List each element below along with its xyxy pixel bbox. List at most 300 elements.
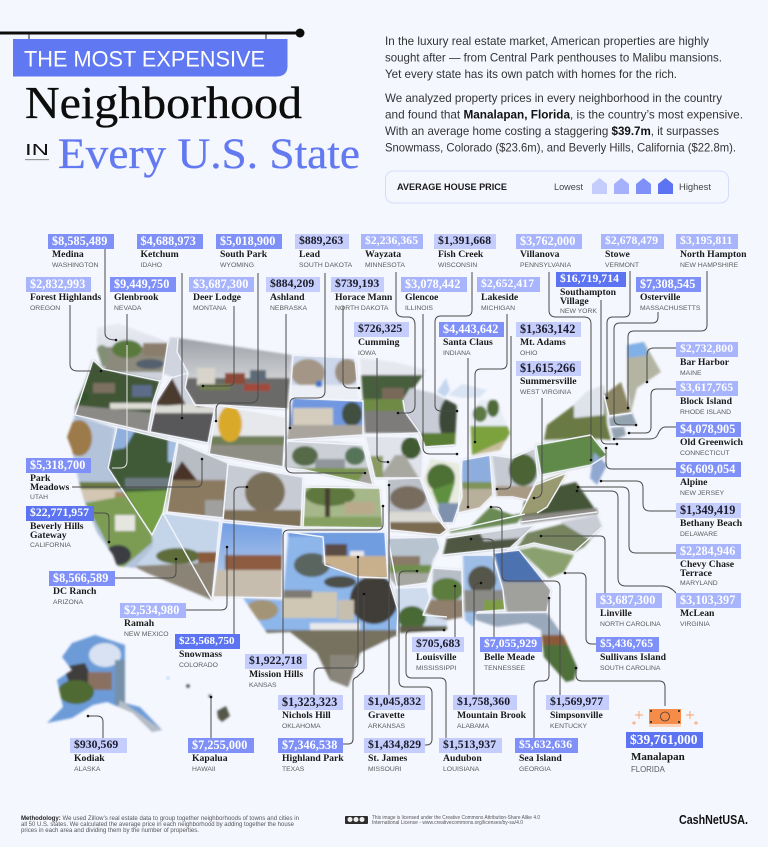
- label: Ramah: NEW MEXICO: [124, 631, 169, 638]
- label: Cumming: Cumming: [358, 337, 399, 348]
- methodology note: all 50 U.S. states. We calculated the average price in each neighborhood by adding together the house: [21, 822, 295, 828]
- state: Washington: [96, 324, 169, 382]
- label: Osterville: MASSACHUSETTS: [640, 305, 700, 312]
- label: Mountain Brook: ALABAMA: [457, 723, 489, 730]
- state: Virginia: [521, 482, 597, 522]
- label: Fish Creek: Fish Creek: [438, 249, 483, 260]
- label: DC Ranch: [49, 571, 115, 607]
- label: St. James: $1,434,829: [368, 738, 421, 751]
- label: DC Ranch: DC Ranch: [53, 586, 96, 597]
- label: Block Island: RHODE ISLAND: [680, 409, 731, 416]
- leader line: Audubon: [406, 630, 446, 738]
- state: Illinois: [423, 459, 462, 524]
- label: Belle Meade: Belle Meade: [484, 652, 535, 663]
- label: Louisville: Louisville: [416, 652, 456, 663]
- label: Gravette: Gravette: [368, 710, 405, 721]
- label: Belle Meade: $7,055,929: [484, 637, 537, 650]
- label: Beverly Hills Gateway: $22,771,957: [30, 506, 89, 519]
- label: Beverly Hills Gateway: Gateway: [30, 530, 67, 541]
- label: North Hampton: [676, 234, 746, 269]
- state: Texas: [240, 535, 400, 690]
- state: Wisconsin: [400, 385, 460, 450]
- state: Indiana: [458, 454, 494, 514]
- label: Alpine: Alpine: [680, 477, 707, 488]
- label: Ashland: [266, 277, 320, 312]
- state: Michigan: [469, 398, 510, 456]
- state: Missouri: [386, 479, 448, 536]
- label: Manalapan: Manalapan: [631, 751, 685, 763]
- leader line: Sea Island: [534, 598, 549, 738]
- label: Linville: NORTH CAROLINA: [600, 621, 661, 628]
- label: Mt. Adams: Mt. Adams: [520, 337, 566, 348]
- label: Simpsonville: [546, 695, 609, 730]
- label: Forest Highlands: Forest Highlands: [30, 292, 101, 303]
- state: New York sky: [574, 385, 604, 418]
- label: Mountain Brook: [453, 695, 526, 730]
- label: Chevy Chase Terrace: Chevy Chase: [680, 559, 734, 570]
- label: Audubon: LOUISIANA: [443, 766, 479, 773]
- label: Fish Creek: $1,391,668: [438, 234, 491, 247]
- label: Block Island: [676, 381, 738, 416]
- label: Cumming: $726,325: [358, 322, 402, 335]
- label: Ketchum: IDAHO: [140, 262, 162, 269]
- state: Tennessee: [443, 525, 535, 555]
- label: Horace Mann: [331, 277, 392, 312]
- label: Snowmass: [175, 634, 240, 670]
- label: Forest Highlands: [26, 277, 101, 312]
- leader line: Chevy Chase Terrace: [578, 487, 676, 553]
- label: Ramah: [120, 603, 186, 639]
- label: Louisville: MISSISSIPPI: [416, 665, 456, 672]
- label: Mountain Brook: $1,758,360: [457, 695, 510, 708]
- heading: in: IN: [25, 142, 49, 159]
- icon: money bill: [632, 709, 698, 727]
- label: Park Meadows: UTAH: [30, 494, 48, 501]
- label: Mountain Brook: Mountain Brook: [457, 710, 526, 721]
- leader line: Belle Meade: [471, 539, 494, 637]
- label: Stowe: [601, 234, 664, 269]
- label: Highland Park: [278, 738, 344, 774]
- label: Linville: $3,687,300: [600, 593, 655, 607]
- leader line: Deer Lodge: [203, 306, 234, 386]
- label: Sea Island: Sea Island: [519, 753, 562, 764]
- leader line: Mt. Adams: [497, 336, 511, 489]
- leader line: Mission Hills: [283, 506, 383, 654]
- label: Ramah: Ramah: [124, 618, 154, 629]
- state: Utah: [165, 440, 230, 520]
- label: Medina: WASHINGTON: [52, 262, 98, 269]
- label: Southampton Village: NEW YORK: [560, 308, 597, 315]
- state: Michigan upper peninsula: [437, 378, 487, 398]
- state: North Carolina: [517, 515, 602, 552]
- state: Kentucky: [450, 507, 525, 533]
- label: Highland Park: TEXAS: [282, 766, 304, 773]
- state: New York: [544, 385, 611, 440]
- label: Bar Harbor: Bar Harbor: [680, 357, 729, 368]
- label: Horace Mann: NORTH DAKOTA: [335, 305, 388, 312]
- label: Glencoe: [401, 277, 467, 312]
- label: Park Meadows: Meadows: [30, 482, 69, 493]
- state: Kansas: [300, 484, 385, 530]
- state: North Dakota: [290, 356, 358, 399]
- state: Montana: [175, 335, 295, 413]
- leader line: Lead: [290, 273, 325, 428]
- legend: average house price: Lowest: [554, 182, 583, 192]
- label: Santa Claus: [439, 322, 504, 357]
- label: Nichols Hill: [278, 695, 343, 730]
- leader line: Lakeside: [475, 314, 507, 442]
- leader line: Block Island: [629, 389, 676, 433]
- intro text: We analyzed property prices in every neighborhood in the country: [385, 91, 722, 105]
- label: Snowmass: $23,568,750: [179, 635, 235, 647]
- label: Belle Meade: TENNESSEE: [484, 665, 525, 672]
- legend: average house price: [386, 171, 728, 203]
- label: North Hampton: $3,195,811: [680, 234, 732, 247]
- leader line: South Park: [216, 273, 258, 421]
- label: Villanova: $3,762,000: [520, 234, 575, 248]
- intro text: [385, 34, 743, 154]
- label: Bar Harbor: [676, 342, 738, 377]
- label: Southampton Village: [556, 272, 626, 315]
- label: Mission Hills: KANSAS: [249, 682, 277, 689]
- label: Lakeside: Lakeside: [481, 292, 518, 303]
- label: Park Meadows: Park: [30, 473, 50, 484]
- leader line: Fish Creek: [435, 272, 472, 411]
- label: McLean: [676, 593, 741, 628]
- leader line: Kapalua: [210, 697, 212, 738]
- label: Wayzata: $2,236,365: [365, 234, 418, 247]
- leader line: Louisville: [454, 586, 456, 637]
- label: Sea Island: GEORGIA: [519, 766, 551, 773]
- state: Hawaii islands: [167, 677, 230, 722]
- label: Southampton Village: $16,719,714: [560, 272, 619, 285]
- state: Virginia road: [521, 508, 598, 524]
- label: Wayzata: MINNESOTA: [365, 262, 405, 269]
- label: Wayzata: [361, 234, 423, 269]
- label: Lakeside: [477, 277, 540, 312]
- leader line: Kodiak: [88, 716, 103, 738]
- label: Stowe: Stowe: [605, 249, 630, 260]
- intro text: With an average home costing a staggering $39.7m, it surpasses: [385, 124, 719, 138]
- label: Park Meadows: [26, 458, 91, 502]
- label: Glenbrook: [110, 277, 176, 312]
- label: South Park: WYOMING: [220, 262, 254, 269]
- label: Villanova: Villanova: [520, 249, 559, 260]
- hanging banner: [0, 28, 304, 76]
- label: Southampton Village: Village: [560, 296, 589, 307]
- leader line: Cumming: [377, 358, 388, 462]
- leader line: Linville: [541, 536, 605, 593]
- leader line: Glencoe: [423, 314, 457, 454]
- license text: International License - www.creativecommons.org/licenses/by-sa/4.0: [372, 820, 523, 826]
- label: Chevy Chase Terrace: [676, 544, 741, 587]
- label: Forest Highlands: OREGON: [30, 305, 60, 312]
- label: Audubon: $1,513,937: [443, 738, 496, 751]
- label: Ashland: Ashland: [270, 292, 304, 303]
- label: Ashland: NEBRASKA: [270, 305, 307, 312]
- state: Connecticut: [611, 427, 626, 440]
- label: Forest Highlands: $2,832,993: [30, 277, 85, 291]
- label: Manalapan: FLORIDA: [631, 765, 665, 774]
- label: Alpine: $6,609,054: [680, 462, 735, 476]
- label: Kodiak: [70, 738, 127, 774]
- label: Kapalua: [188, 738, 254, 774]
- label: Snowmass: Snowmass: [179, 649, 222, 660]
- state: West Virginia: [520, 473, 567, 515]
- label: Summersville: WEST VIRGINIA: [520, 389, 571, 396]
- leader line: Horace Mann: [343, 306, 359, 388]
- label: Bar Harbor: MAINE: [680, 370, 702, 377]
- state: Mississippi: [425, 566, 465, 622]
- label: North Hampton: NEW HAMPSHIRE: [680, 262, 738, 269]
- label: McLean: $3,103,397: [680, 593, 735, 607]
- legend icon: low house: [614, 178, 629, 194]
- leader line: Old Greenwich: [614, 427, 676, 439]
- label: Old Greenwich: CONNECTICUT: [680, 450, 729, 457]
- label: Glenbrook: $9,449,750: [114, 277, 169, 291]
- creative commons badge: [345, 816, 368, 824]
- state: Maine sky: [627, 342, 648, 358]
- label: Simpsonville: KENTUCKY: [550, 723, 587, 730]
- label: Fish Creek: [434, 234, 496, 269]
- label: Deer Lodge: [189, 277, 254, 312]
- label: McLean: VIRGINIA: [680, 621, 710, 628]
- label: Manalapan: [626, 732, 703, 774]
- label: Block Island: $3,617,765: [680, 381, 733, 394]
- label: Osterville: $7,308,545: [640, 277, 695, 291]
- label: Sullivans Island: Sullivans Island: [600, 652, 666, 663]
- label: Glenbrook: Glenbrook: [114, 292, 159, 303]
- label: Ketchum: Ketchum: [140, 249, 179, 260]
- leader line: Stowe: [607, 271, 630, 398]
- leader line: McLean: [577, 491, 676, 593]
- state: Alabama: [460, 553, 508, 629]
- label: Medina: Medina: [52, 249, 84, 260]
- label: Sullivans Island: $5,436,765: [600, 637, 653, 650]
- label: Horace Mann: Horace Mann: [335, 292, 392, 303]
- label: Beverly Hills Gateway: Beverly Hills: [30, 521, 84, 532]
- state: California: [66, 416, 154, 569]
- label: Ketchum: [137, 234, 203, 269]
- label: Cumming: [354, 322, 409, 357]
- leader line: Forest Highlands: [70, 305, 101, 371]
- label: Bethany Beach: DELAWARE: [680, 531, 718, 538]
- state: Louisiana: [394, 588, 449, 634]
- state: Iowa: [366, 436, 422, 480]
- label: Linville: Linville: [600, 608, 632, 619]
- leader line: Sullivans Island: [565, 573, 596, 644]
- label: Gravette: [364, 695, 425, 730]
- label: Lakeside: $2,652,417: [481, 277, 534, 290]
- state: Tennessee sky: [480, 525, 535, 541]
- leader line: Snowmass: [234, 487, 247, 634]
- label: Bethany Beach: $1,349,419: [680, 503, 735, 517]
- state: Minnesota: [360, 358, 426, 434]
- legend: average house price: Highest: [679, 182, 712, 192]
- state: Nebraska: [280, 439, 376, 487]
- label: Lead: Lead: [299, 249, 320, 260]
- state: Arkansas: [387, 536, 441, 587]
- state: South Dakota: [285, 396, 365, 442]
- license text: [372, 815, 540, 826]
- legend icon: high house: [636, 178, 651, 194]
- label: Chevy Chase Terrace: MARYLAND: [680, 580, 718, 587]
- label: Highland Park: $7,346,538: [282, 738, 337, 752]
- label: Wayzata: Wayzata: [365, 249, 401, 260]
- intro text: and found that Manalapan, Florida, is the country’s most expensive.: [385, 108, 743, 122]
- leader line: Osterville: [614, 312, 658, 425]
- leader line: Villanova: [549, 272, 591, 460]
- label: Lead: [295, 234, 352, 269]
- label: Sea Island: [515, 738, 578, 773]
- license text: This image is licensed under the Creative Commons Attribution-Share Alike 4.0: [372, 815, 540, 821]
- leader line: Simpsonville: [491, 507, 560, 695]
- state: Pennsylvania: [536, 435, 607, 475]
- label: North Hampton: North Hampton: [680, 249, 746, 260]
- label: Kodiak: Kodiak: [74, 753, 105, 764]
- label: Nichols Hill: Nichols Hill: [282, 710, 331, 721]
- state: Nevada: [105, 425, 180, 540]
- label: Alpine: [676, 462, 741, 497]
- legend icon: lowest house: [592, 178, 607, 194]
- map of U.S. states photo collage: [46, 324, 662, 733]
- label: Chevy Chase Terrace: $2,284,946: [680, 544, 735, 558]
- leader line: Santa Claus: [467, 358, 469, 507]
- label: Villanova: PENNSYLVANIA: [520, 262, 571, 269]
- legend: average house price: AVERAGE HOUSE PRICE: [397, 182, 507, 192]
- label: Glencoe: Glencoe: [405, 292, 438, 303]
- state: New Jersey: [590, 452, 607, 485]
- label: Medina: $8,585,489: [52, 234, 107, 248]
- label: South Park: $5,018,900: [220, 234, 275, 248]
- label: Osterville: [636, 277, 701, 312]
- state: Georgia: [490, 548, 555, 614]
- leader line: Wayzata: [396, 272, 415, 413]
- label: Santa Claus: INDIANA: [443, 350, 471, 357]
- label: Lakeside: MICHIGAN: [481, 305, 515, 312]
- label: Deer Lodge: $3,687,300: [193, 277, 248, 291]
- label: Nichols Hill: OKLAHOMA: [282, 723, 321, 730]
- label: South Park: South Park: [220, 249, 267, 260]
- label: Glencoe: $3,078,442: [405, 277, 460, 291]
- label: Mt. Adams: [516, 322, 581, 357]
- label: Sea Island: $5,632,636: [519, 738, 572, 751]
- label: Lead: $889,263: [299, 234, 343, 247]
- label: Sullivans Island: [596, 637, 666, 672]
- label: Summersville: [516, 361, 581, 396]
- label: Fish Creek: WISCONSIN: [438, 262, 477, 269]
- label: Horace Mann: $739,193: [335, 277, 379, 290]
- label: Santa Claus: $4,443,642: [443, 322, 498, 336]
- label: Simpsonville: $1,569,977: [550, 695, 603, 708]
- state: Oklahoma: [285, 530, 390, 580]
- label: Kapalua: $7,255,000: [192, 738, 247, 752]
- logo: CashNetUSA: CashNetUSA.: [679, 812, 748, 827]
- state: North Carolina fade: [560, 515, 602, 540]
- leader line: Park Meadows: [72, 459, 202, 487]
- label: South Park: [216, 234, 282, 269]
- leader line: DC Ranch: [115, 559, 176, 578]
- label: Lead: SOUTH DAKOTA: [299, 262, 352, 269]
- leader line: Summersville: [534, 398, 542, 498]
- label: Bethany Beach: [676, 503, 742, 538]
- label: Bar Harbor: $2,732,800: [680, 342, 733, 355]
- label: Gravette: ARKANSAS: [368, 723, 405, 730]
- leader line: Medina: [105, 249, 116, 340]
- state: Florida: [474, 611, 579, 686]
- leader line: Mountain Brook: [474, 583, 481, 695]
- state: Massachusetts: [609, 413, 637, 427]
- label: McLean: McLean: [680, 608, 714, 619]
- methodology note: Methodology: We used Zillow’s real estate data to group together neighborhoods of towns and cities in: [21, 816, 299, 822]
- leader line: Glenbrook: [112, 314, 127, 468]
- label: Ketchum: $4,688,973: [140, 234, 196, 248]
- state: New Mexico: [214, 521, 284, 600]
- state: Vermont and New Hampshire: [604, 382, 631, 416]
- intro text: In the luxury real estate market, American properties are highly: [385, 34, 709, 48]
- leader line: Highland Park: [343, 594, 364, 744]
- state border lines: [75, 338, 637, 635]
- label: Belle Meade: [480, 637, 542, 672]
- label: Southampton Village: Southampton: [560, 287, 616, 298]
- label: Kapalua: HAWAII: [192, 766, 216, 773]
- leader line: Ramah: [186, 547, 227, 610]
- label: Glencoe: ILLINOIS: [405, 305, 433, 312]
- label: Louisville: [412, 637, 464, 672]
- label: Deer Lodge: Deer Lodge: [193, 292, 241, 303]
- state: Maine: [627, 342, 661, 412]
- label: Simpsonville: Simpsonville: [550, 710, 603, 721]
- leader line: Ketchum: [181, 273, 183, 418]
- state: South Carolina: [519, 547, 574, 578]
- state: Oregon: [74, 359, 161, 434]
- label: Park Meadows: $5,318,700: [30, 458, 85, 472]
- label: Stowe: VERMONT: [605, 262, 639, 269]
- label: Gravette: $1,045,832: [368, 695, 421, 708]
- label: Louisville: $705,683: [416, 637, 460, 650]
- leader line: Ashland: [286, 314, 365, 473]
- label: DC Ranch: ARIZONA: [53, 599, 83, 606]
- label: Manalapan: $39,761,000: [630, 732, 698, 747]
- leader line: Bethany Beach: [601, 481, 676, 511]
- label: Mt. Adams: $1,363,142: [520, 322, 575, 336]
- state photo tiles: [45, 320, 661, 734]
- label: Kodiak: ALASKA: [74, 766, 100, 773]
- intro text: Snowmass, Colorado ($23.6m), and Beverly Hills, California ($22.8m).: [385, 140, 736, 154]
- leader line: Alpine: [606, 448, 676, 469]
- label: Glenbrook: NEVADA: [114, 305, 141, 312]
- label: Old Greenwich: [676, 422, 743, 457]
- label: St. James: MISSOURI: [368, 766, 402, 773]
- label: Old Greenwich: Old Greenwich: [680, 437, 743, 448]
- leader line: Southampton Village: [601, 300, 617, 444]
- state: Alaska: [45, 632, 165, 734]
- label: Beverly Hills Gateway: [26, 506, 94, 550]
- label: Ramah: $2,534,980: [124, 603, 179, 617]
- label: Kapalua: Kapalua: [192, 753, 228, 764]
- label: Snowmass: COLORADO: [179, 662, 218, 669]
- label: Audubon: Audubon: [443, 753, 482, 764]
- label: Beverly Hills Gateway: CALIFORNIA: [30, 542, 71, 549]
- label: Summersville: $1,615,266: [520, 361, 575, 375]
- label: Medina: [48, 234, 114, 269]
- label: Ashland: $884,209: [270, 277, 314, 290]
- heading: in: [25, 142, 49, 160]
- legend icon: highest house: [658, 178, 673, 194]
- state: Colorado: [222, 462, 307, 530]
- label: Deer Lodge: MONTANA: [193, 305, 226, 312]
- intro text: Yet every state has its own patch with homes for the rich.: [385, 67, 677, 81]
